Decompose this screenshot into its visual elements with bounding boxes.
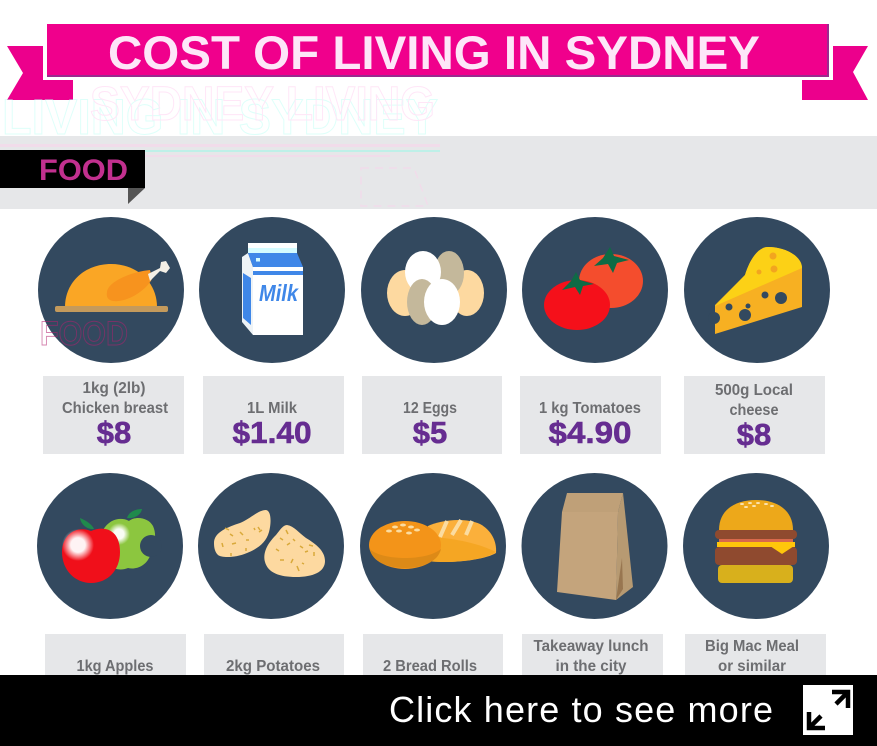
label: chicken: 1kg (2lb) [82,380,146,397]
icon: chicken [38,217,184,363]
icon: eggs [361,217,507,363]
label: cheese [684,376,825,454]
label: apples: 1kg Apples [76,658,154,675]
grey section band [0,136,877,209]
ghost text artefact: SYDNEY LIVING [90,78,435,131]
icon: apples [37,473,183,619]
label: big mac meal: or similar [718,658,786,675]
label: tomatoes [520,376,661,454]
label: potatoes [204,634,344,675]
label: takeaway lunch [522,634,663,675]
icon: milk carton [199,217,345,363]
label: milk [203,376,344,454]
section tag: food [0,150,145,204]
ghost text artefact: LIVING IN SYDNEY [2,89,438,145]
label: takeaway lunch: Takeaway lunch [534,638,648,655]
label: milk: $1.40 [232,415,312,450]
icon: potatoes [198,473,344,619]
label: big mac meal [685,634,826,675]
label: takeaway lunch: in the city [556,658,627,675]
label: eggs: $5 [413,415,447,450]
icon: cheese [684,217,830,363]
icon: tomatoes [522,217,668,363]
icon: burger [683,473,829,619]
label: eggs [362,376,502,454]
label: milk: 1L Milk [247,400,297,417]
label: tomatoes: 1 kg Tomatoes [539,400,641,417]
call to action bar [0,675,877,746]
label: cheese: cheese [730,402,779,419]
ghost text artefact [0,78,440,206]
label: chicken: Chicken breast [62,400,168,417]
label: big mac meal: Big Mac Meal [705,638,799,655]
icon: expand arrows [803,685,853,735]
label: cheese: 500g Local [715,382,793,399]
label: potatoes: 2kg Potatoes [226,658,320,675]
icon: milk carton: Milk [259,280,299,306]
label: bread rolls: 2 Bread Rolls [383,658,477,675]
label: chicken [43,376,184,454]
icon: paper bag [522,473,668,619]
icon: chicken: FOOD [40,315,128,353]
label: tomatoes: $4.90 [548,415,632,450]
label: cheese: $8 [737,417,771,452]
call to action text: Click here to see more [389,689,773,730]
label: eggs: 12 Eggs [403,400,457,417]
title ribbon [7,21,868,100]
label: bread rolls [363,634,503,675]
heading: food: FOOD [39,154,128,187]
title: COST OF LIVING IN SYDNEY [108,26,760,79]
label: chicken: $8 [97,415,131,450]
icon: bread rolls [360,473,506,619]
label: apples [45,634,186,675]
